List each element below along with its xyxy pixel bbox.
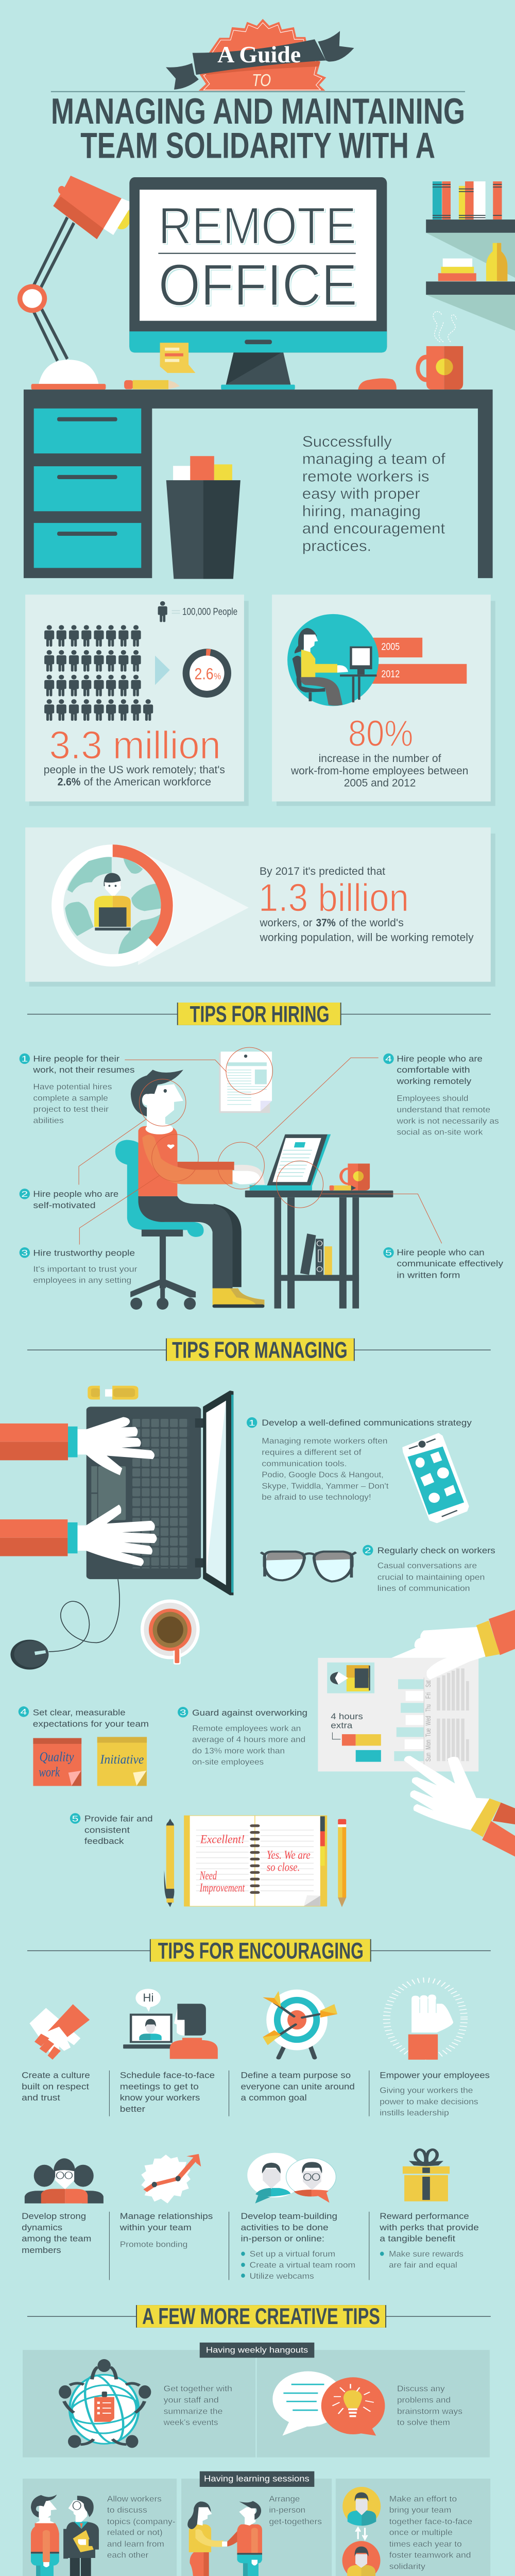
caption [290, 753, 468, 789]
tip 1 text: Managing remote workers often [262, 1436, 388, 1446]
tag: having weekly hangouts [200, 2343, 314, 2358]
icon: team of three [25, 2158, 104, 2204]
illustration: handshake [187, 2501, 262, 2576]
tip: team-building: Create a virtual team room [250, 2261, 355, 2269]
text: allow workers: and learn from [107, 2539, 164, 2549]
tip 1 text [247, 1417, 472, 1502]
tip 3: 3 [21, 1248, 28, 1258]
text: discuss: Discuss any [397, 2384, 445, 2394]
tips for hiring section [20, 1001, 504, 1310]
icon: wired mouse [10, 1579, 119, 1670]
tip 2: Hire people who are [33, 1190, 118, 1199]
tip 3: It's important to trust your [33, 1265, 138, 1274]
tip: empower [380, 2071, 490, 2117]
tip: relationships: Manage relationships [120, 2212, 213, 2221]
calendar day labels: Sat [424, 1680, 433, 1687]
intro text: easy with proper [302, 485, 420, 502]
tip 5 [383, 1247, 504, 1280]
heading: tips for managing: TIPS FOR MANAGING [172, 1337, 348, 1363]
icon: team around globe [59, 2359, 151, 2448]
tag: having learning sessions [200, 2471, 314, 2487]
icon: trash bin [166, 456, 241, 579]
icon: notebook with pen and pencil [164, 1816, 346, 1907]
stats section [25, 595, 495, 987]
calendar day labels [424, 1680, 433, 1761]
text: allow workers [107, 2495, 176, 2560]
tip 1 text: Develop a well-defined communications strategy [262, 1418, 472, 1428]
text: arrange: in-person [269, 2505, 305, 2515]
icon: two portraits with arrows [342, 2487, 381, 2576]
icon: sticky note [160, 343, 195, 373]
legs [138, 1196, 264, 1308]
badge: a guide to: TO [252, 70, 271, 90]
text: get together: your staff and [164, 2396, 219, 2404]
heading: tips for hiring: TIPS FOR HIRING [190, 1001, 330, 1027]
icon: raised fist with rays [387, 1980, 464, 2060]
tip 1: Hire people for their [33, 1054, 119, 1063]
tip: relationships [119, 2212, 213, 2249]
tip 1 text: Skype, Twiddla, Yammer – Don't [262, 1481, 389, 1490]
icon: usb stick [88, 1386, 138, 1400]
text: get together [163, 2384, 232, 2427]
text: arrange: get-togethers [269, 2517, 322, 2526]
icon: notebook with pen and pencil: Improvement [199, 1881, 245, 1894]
caption: work-from-home employees between [290, 765, 468, 777]
caption: people in the US work remotely; that's [44, 764, 225, 776]
heading: tips for hiring [177, 1001, 341, 1027]
panel: 80% [272, 595, 495, 806]
tip 5: Hire people who can [397, 1248, 485, 1258]
intro text: remote workers is [302, 468, 430, 485]
icon: laptop with typing hands [0, 1391, 233, 1595]
icon: idea bubbles [272, 2371, 385, 2436]
monitor with remote office screen: OFFICE [158, 252, 357, 318]
tip 3 text: 3 [180, 1708, 186, 1717]
tip 3 [20, 1247, 138, 1285]
learning sessions and footer section [0, 2471, 515, 2576]
4 hours extra chart: extra [331, 1721, 353, 1731]
tip 4: working remotely [396, 1077, 472, 1086]
tip 3 text: Remote employees work an [192, 1724, 301, 1733]
icon: smartphone with apps [403, 1434, 468, 1522]
tip: dynamics [22, 2212, 91, 2255]
icon: video call: Hi [143, 1991, 153, 2004]
tip: face-to-face: know your workers [120, 2093, 200, 2103]
sticky note: quality work: Quality [40, 1750, 74, 1765]
tip 3 text: Guard against overworking [192, 1708, 307, 1718]
table with laptop, mug and binders [245, 1134, 393, 1309]
text: make an effort: times each year to [389, 2539, 462, 2549]
tip: dynamics: dynamics [22, 2223, 62, 2232]
tip: empower: power to make decisions [380, 2097, 478, 2106]
tip 1: project to test their [33, 1105, 109, 1114]
tip: face-to-face: better [120, 2105, 145, 2114]
tip 3 text: on-site employees [192, 1757, 264, 1767]
tip: culture: and trust [22, 2093, 60, 2103]
tip 1: Have potential hires [33, 1082, 112, 1091]
tip: dynamics: members [22, 2246, 61, 2255]
tip: rewards: a tangible benefit [380, 2234, 455, 2244]
calendar day labels: Sun [424, 1753, 433, 1761]
tip: team purpose: a common goal [241, 2093, 307, 2103]
tip 1 text: communication tools. [262, 1459, 347, 1468]
calendar day labels: Fri [424, 1692, 433, 1699]
intro text: and encouragement [302, 520, 445, 537]
desk with drawers [24, 389, 493, 578]
text: arrange: Arrange [269, 2495, 300, 2503]
4 hours extra chart: 4 hours [331, 1711, 363, 1721]
panel: 3.3 million: 3.3 million [49, 723, 221, 767]
tip: team purpose: Define a team purpose so [241, 2071, 351, 2080]
tip: culture: Create a culture [22, 2071, 90, 2080]
newspaper held by hands [318, 1610, 515, 1857]
tip: rewards: with perks that provide [379, 2223, 479, 2232]
monitor with remote office screen: OFFICE [160, 253, 358, 319]
icon: glasses [261, 1552, 356, 1582]
tip 4 text and sticky notes [19, 1706, 149, 1786]
tip: dynamics: among the team [22, 2234, 91, 2244]
icon: conversation bubbles [247, 2153, 336, 2204]
icon: mouse [358, 378, 397, 389]
tip 3 text: average of 4 hours more and [192, 1735, 305, 1744]
text: make an effort: bring your team [389, 2505, 451, 2515]
text: make an effort: together face-to-face [389, 2517, 472, 2526]
icon: notebook with pen and pencil: Need [199, 1869, 217, 1883]
tip: team purpose [241, 2071, 355, 2103]
tip 5 text: Provide fair and [84, 1814, 153, 1823]
lower hand [404, 1756, 515, 1857]
tip: team purpose: everyone can unite around [241, 2082, 355, 2091]
title: TEAM SOLIDARITY WITH A [80, 125, 435, 166]
calendar day labels: Thu [424, 1704, 433, 1711]
tip 1: complete a sample [33, 1094, 108, 1103]
text: allow workers: each other [107, 2551, 149, 2560]
icon: desk lamp [18, 176, 133, 389]
caption: increase in the number of [319, 753, 441, 765]
intro text: practices. [302, 537, 371, 554]
prediction text: of the world's [339, 917, 404, 929]
tag: having learning sessions: Having learning sessions [204, 2475, 310, 2484]
tip: face-to-face: meetings to get to [120, 2082, 199, 2091]
text: discuss: brainstorm ways [397, 2406, 462, 2416]
heading: tips for encouraging [150, 1938, 371, 1963]
tip 5 text: consistent [84, 1826, 130, 1835]
icon: coffee mug [418, 312, 463, 389]
sticky note: initiative: Initiative [100, 1752, 144, 1766]
tip 4 text and sticky notes: expectations for your team [33, 1720, 149, 1728]
tip 5 text: feedback [84, 1837, 124, 1846]
upper hand [391, 1610, 515, 1680]
chair [115, 1140, 203, 1310]
tip: team-building [241, 2212, 355, 2281]
callout rings and leader lines [79, 1047, 442, 1245]
tip 2 text: Casual conversations are [377, 1561, 477, 1570]
tip: culture: built on respect [22, 2082, 89, 2091]
tip 2: 2 [21, 1190, 28, 1199]
caption: of the American workforce [84, 776, 211, 788]
head [131, 1070, 183, 1134]
text: make an effort: Make an effort to [389, 2495, 457, 2503]
tip 2 text [363, 1545, 495, 1593]
prediction text: 1.3 billion [259, 876, 409, 920]
text: allow workers: related or not) [107, 2528, 163, 2537]
tip 3 text [178, 1707, 307, 1767]
title: MANAGING AND MAINTAINING [51, 91, 465, 131]
pictogram: 33 people [44, 625, 153, 721]
panel: learning sessions [23, 2471, 490, 2576]
panel: 3.3 million [25, 595, 249, 806]
illustration: two men talking [31, 2495, 99, 2576]
text: allow workers: to discuss [107, 2505, 147, 2515]
icon: resume page [219, 1052, 272, 1113]
tip: face-to-face [120, 2071, 215, 2114]
text: discuss: to solve them [397, 2418, 450, 2427]
bars 2005 and 2012: 2005 [381, 641, 400, 652]
legend: person equals 100,000 [158, 601, 237, 622]
tip 5 text: 5 [72, 1814, 78, 1823]
badge: a guide to [166, 19, 354, 91]
tip: team-building: Develop team-building [241, 2212, 337, 2221]
tip 3: Hire trustworthy people [33, 1249, 135, 1258]
intro text [302, 433, 445, 554]
text: allow workers: topics (company- [107, 2517, 176, 2526]
tip 2: self-motivated [33, 1201, 96, 1210]
text: discuss [397, 2384, 462, 2427]
tip 1: work, not their resumes [32, 1065, 134, 1075]
tip: relationships: Promote bonding [120, 2240, 187, 2249]
tip: rewards: Make sure rewards [389, 2249, 464, 2259]
panel: 1.3 billion [25, 827, 495, 987]
tip: dynamics: Develop strong [22, 2212, 86, 2221]
tag: having weekly hangouts: Having weekly hangouts [206, 2346, 308, 2355]
icon: target with darts [263, 1990, 337, 2058]
monitor with remote office screen [129, 177, 387, 389]
tip 5: in written form [397, 1271, 460, 1280]
tip 1: 1 [21, 1055, 28, 1064]
caption: 2005 and 2012 [344, 777, 416, 789]
tip 1 text: requires a different set of [262, 1448, 362, 1457]
tip: rewards [379, 2212, 479, 2269]
tip 4 text and sticky notes: Set clear, measurable [33, 1708, 126, 1718]
intro text: Successfully [302, 433, 392, 450]
tip 1: abilities [33, 1116, 64, 1125]
arrow [155, 655, 170, 685]
tip 4: 4 [385, 1055, 392, 1064]
tip 2 [20, 1189, 118, 1210]
calendar day labels: Mon [424, 1740, 433, 1750]
tip 1 text: 1 [249, 1418, 255, 1428]
tip 4: social as on-site work [397, 1128, 483, 1137]
tip: rewards: Reward performance [380, 2212, 469, 2221]
icon: notebook with pen and pencil: Yes. We are [267, 1849, 311, 1862]
caption: 2.6% [58, 776, 80, 788]
person at table [115, 1070, 265, 1310]
sticky note: initiative [97, 1737, 147, 1786]
torso and arms [138, 1126, 265, 1196]
text: allow workers: Allow workers [107, 2495, 162, 2503]
tip: team-building: Set up a virtual forum [250, 2249, 335, 2259]
badge: a guide to: A Guide [217, 42, 301, 68]
prediction text [259, 865, 474, 944]
tip 4: Hire people who are [397, 1054, 483, 1063]
tip 1 text: be afraid to use technology! [262, 1493, 371, 1502]
tip 1 text: Podio, Google Docs & Hangout, [262, 1470, 384, 1479]
tip 4: Employees should [397, 1094, 468, 1103]
hero section [18, 19, 515, 579]
tip 4 text and sticky notes: 4 [21, 1707, 27, 1717]
icon: video call [123, 1989, 218, 2059]
monitor with remote office screen: REMOTE [160, 198, 358, 257]
tip: empower: instills leadership [380, 2108, 449, 2117]
title [51, 91, 465, 166]
text: make an effort [389, 2495, 472, 2571]
text: get together: week's events [163, 2418, 218, 2427]
tip: rewards: are fair and equal [389, 2261, 457, 2269]
tip: team-building: activities to be done [241, 2223, 329, 2232]
tip: face-to-face: Schedule face-to-face [120, 2071, 215, 2080]
tip 5: 5 [385, 1248, 392, 1258]
tip 5 text [70, 1813, 153, 1846]
tip 4: comfortable with [397, 1065, 470, 1075]
donut chart: 2.6%: % [214, 671, 221, 682]
tip: team-building: Utilize webcams [250, 2272, 314, 2281]
icon: pencil [124, 380, 180, 389]
tip 3: employees in any setting [33, 1276, 131, 1285]
sticky note: quality work: work [39, 1765, 60, 1780]
calendar day labels: Wed [424, 1716, 433, 1725]
text: make an effort: solidarity [389, 2562, 425, 2571]
tip 2 text: lines of communication [377, 1584, 470, 1593]
icon: coffee cup [141, 1599, 200, 1665]
text: get together: Get together with [164, 2384, 232, 2394]
tip 4 [383, 1054, 499, 1137]
icon: notebook with pen and pencil: Excellent! [200, 1833, 245, 1846]
sticky note: quality work [33, 1738, 81, 1786]
tip 2 text: 2 [365, 1546, 371, 1555]
panel: weekly hangouts [23, 2343, 490, 2458]
bars 2005 and 2012 [371, 638, 467, 684]
legend: person equals 100,000: 100,000 People [182, 606, 237, 617]
text: arrange [269, 2495, 322, 2526]
icon: growth chart [141, 2154, 201, 2204]
icon: handshake [29, 2004, 90, 2060]
bars 2005 and 2012: 2012 [381, 668, 400, 680]
text: get together: summarize the [164, 2406, 222, 2416]
text: discuss: problems and [397, 2396, 451, 2404]
tip 2 text: crucial to maintaining open [377, 1573, 485, 1582]
wall shelves with books [426, 181, 515, 331]
tip 3 text: do 13% more work than [192, 1747, 285, 1756]
tips for managing section [0, 1337, 515, 1907]
tip: team-building: in-person or online: [241, 2234, 324, 2244]
icon: globe with remote worker [52, 844, 249, 967]
4 hours extra chart [331, 1711, 381, 1762]
heading: a few more creative tips [136, 2303, 386, 2329]
prediction text: 37% [316, 917, 336, 929]
panel: 80%: 80% [348, 713, 413, 754]
tips for encouraging section [27, 1938, 491, 2060]
icon: woman at computer [287, 614, 379, 706]
encouraging tips row one [22, 2071, 491, 2458]
monitor with remote office screen: REMOTE [158, 197, 356, 255]
text: make an effort: once or multiple [389, 2528, 453, 2537]
calendar day labels: Tue [424, 1728, 433, 1737]
prediction text: workers, or [260, 917, 313, 929]
heading: tips for managing [166, 1337, 355, 1363]
tip: relationships: within your team [119, 2223, 192, 2232]
caption [44, 764, 225, 788]
prediction text: By 2017 it's predicted that [260, 865, 385, 877]
icon: notebook with pen and pencil: so close. [267, 1860, 300, 1874]
text: make an effort: foster teamwork and [389, 2551, 471, 2560]
intro text: managing a team of [302, 450, 445, 467]
tip: empower: Giving your workers the [380, 2086, 473, 2095]
donut chart: 2.6%: 2.6 [195, 665, 214, 683]
icon: gift box [403, 2149, 450, 2201]
intro text: hiring, managing [302, 502, 421, 519]
tip 1 [20, 1054, 134, 1125]
donut chart: 2.6% [183, 649, 231, 698]
tip: culture [22, 2071, 90, 2103]
